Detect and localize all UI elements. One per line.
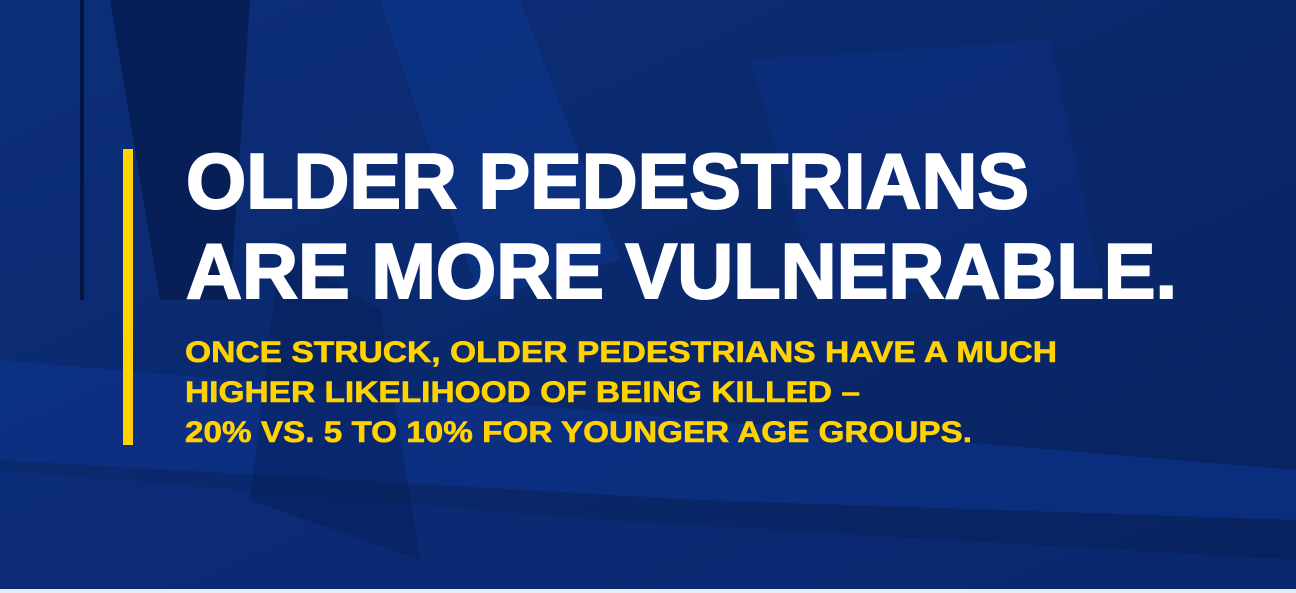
subtitle statistic: 20% VS. 5 TO 10% FOR YOUNGER AGE GROUPS. [185, 416, 972, 449]
title: ARE MORE VULNERABLE. [186, 227, 1177, 315]
accent bar [123, 149, 133, 445]
subtitle statistic: HIGHER LIKELIHOOD OF BEING KILLED – [185, 376, 860, 409]
title [186, 137, 1177, 315]
subtitle statistic [185, 336, 1057, 449]
subtitle statistic: ONCE STRUCK, OLDER PEDESTRIANS HAVE A MUCH [185, 336, 1057, 369]
title: OLDER PEDESTRIANS [186, 137, 1029, 225]
